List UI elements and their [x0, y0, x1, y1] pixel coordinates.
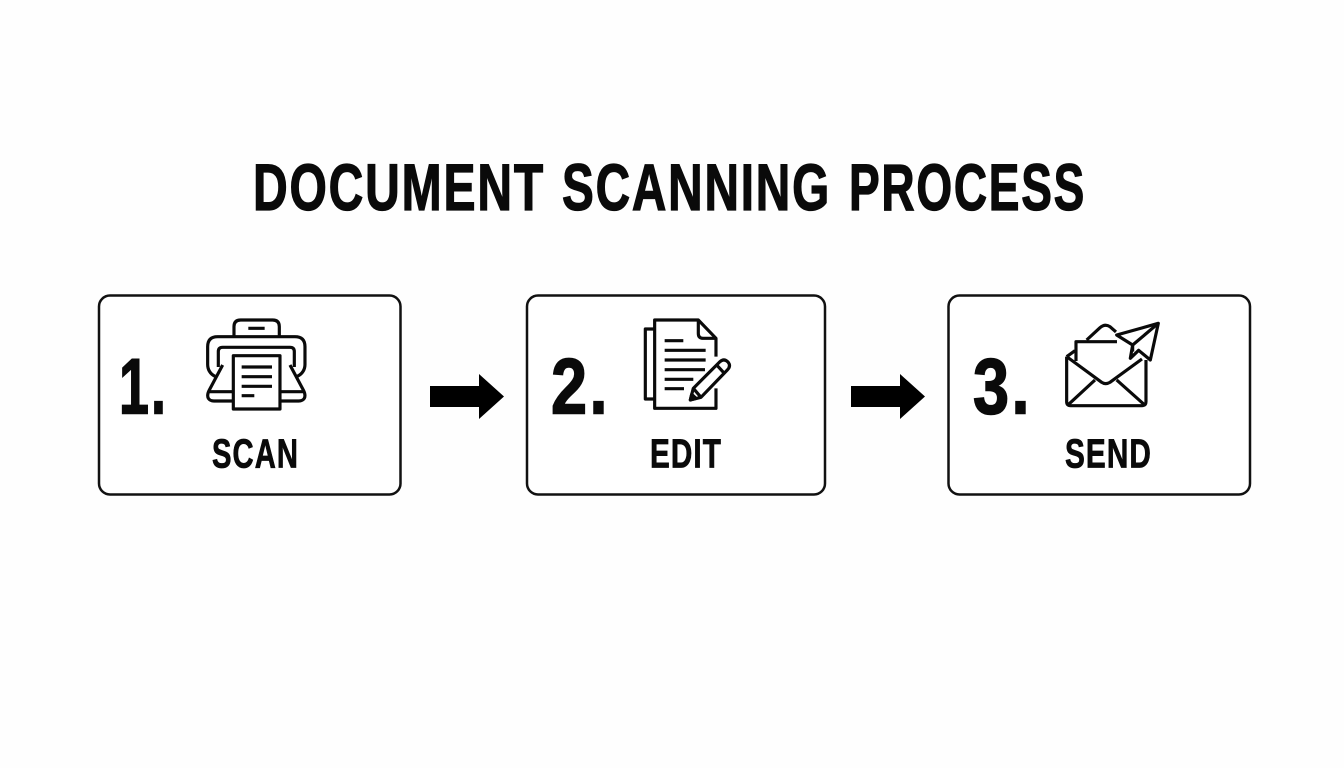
- card outline: scan: [99, 296, 400, 494]
- panel: step 2 edit: [527, 296, 825, 494]
- title: DOCUMENT: [253, 150, 545, 224]
- arrow: edit to send: [851, 374, 925, 419]
- panel: step 3 send: [948, 296, 1250, 494]
- label: send: SEND: [1065, 430, 1152, 476]
- arrow: scan to edit: [430, 374, 504, 419]
- panel: step 1 scan: [99, 296, 400, 494]
- step number 3: 3.: [973, 342, 1032, 430]
- label: scan: SCAN: [212, 430, 299, 476]
- title: [253, 150, 1086, 224]
- icon: envelope with paper plane: [1067, 323, 1158, 406]
- label: edit: EDIT: [650, 430, 722, 476]
- step number 2: 2.: [551, 342, 610, 430]
- step number 1: 1.: [119, 342, 168, 430]
- card outline: edit: [527, 296, 825, 494]
- title: PROCESS: [849, 150, 1086, 224]
- card outline: send: [948, 296, 1250, 494]
- icon: document scanner: [208, 320, 305, 409]
- icon: document with pencil: [645, 320, 729, 408]
- title: SCANNING: [562, 150, 831, 224]
